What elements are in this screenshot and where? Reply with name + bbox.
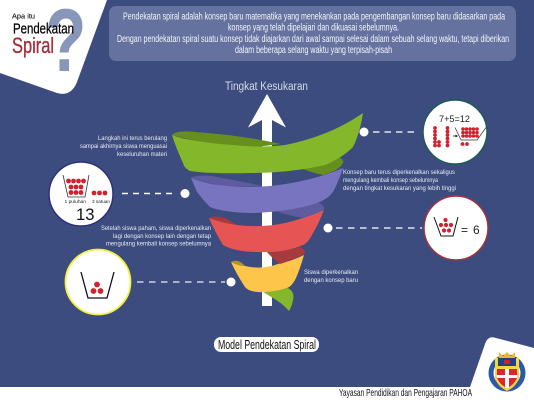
footer bar (0, 337, 534, 400)
step text: after understanding: mengulang kembali konsep sebelumnya (106, 242, 212, 248)
connector: top right (360, 128, 415, 136)
intro text panel (109, 6, 516, 61)
spiral back: green tip (263, 288, 293, 311)
spiral front: green band (172, 113, 363, 173)
spiral back: dark purple (191, 176, 324, 218)
connector: right (324, 224, 422, 232)
icon circle: 13: 3 satuan (92, 199, 111, 204)
step text: repeat until mastery (80, 136, 167, 158)
icon circle: basket equals 6: 6 (473, 223, 480, 237)
icon circle: 13: 1 puluhan (64, 199, 87, 204)
step text: new concept plus review: dengan tingkat kesukaran yang lebih tinggi (343, 186, 456, 192)
title (12, 14, 74, 58)
icon circle: 3 dots basket (66, 250, 130, 314)
spiral (172, 113, 363, 311)
spiral front: purple band (191, 168, 343, 213)
step text: new concept plus review (343, 170, 456, 192)
spiral back: dark yellow (231, 261, 245, 268)
icon: school crest (488, 352, 526, 392)
step text: repeat until mastery: sampai akhirnya siswa menguasai (80, 144, 167, 150)
connector: left (122, 189, 190, 198)
step text: repeat until mastery: Langkah ini terus berulang (98, 136, 167, 142)
spiral back: dark green (172, 131, 343, 175)
step text: after understanding (101, 226, 212, 248)
header panel: white corner (0, 0, 107, 94)
icon circle: basket equals 6 (424, 196, 488, 260)
spiral back: dark red (209, 216, 305, 264)
step text: introduce new concept: Siswa diperkenalkan (304, 270, 358, 276)
step text: new concept plus review: Konsep baru terus diperkenalkan sekaligus (343, 170, 455, 176)
icon circle: 7+5=12 (423, 100, 487, 164)
label pill: model (214, 337, 319, 352)
spiral front: yellow band (231, 255, 304, 292)
step text: introduce new concept: dengan konsep baru (304, 278, 358, 284)
label pill: model: Model Pendekatan Spiral (218, 337, 316, 352)
title: Apa itu (12, 14, 35, 20)
step text: introduce new concept (304, 270, 358, 284)
axis label: Tingkat Kesukaran (225, 81, 308, 93)
title: Pendekatan (13, 22, 74, 38)
arrow: difficulty axis (248, 94, 286, 306)
icon circle: basket equals 6: = (461, 223, 468, 237)
connector: bottom left (137, 278, 236, 286)
intro text panel: konsep yang telah dipelajari dan dikuasai sebelumnya. (228, 22, 399, 34)
intro text panel: dalam beberapa selang waktu yang terpisah-pisah (235, 45, 392, 56)
icon circle: 13 (49, 162, 113, 226)
step text: after understanding: lagi dengan konsep lain dengan tetap (113, 234, 212, 240)
icon circle: 13: 13 (76, 205, 94, 224)
step text: new concept plus review: mengulang kembali konsep sebelumnya (343, 178, 439, 184)
spiral front: red band (209, 210, 324, 252)
icon circle: 7+5=12: 7+5=12 (439, 114, 470, 124)
step text: repeat until mastery: keseluruhan materi (117, 152, 167, 158)
step text: after understanding: Setelah siswa paham, siswa diperkenalkan (101, 226, 211, 232)
title: Spiral (12, 33, 54, 58)
